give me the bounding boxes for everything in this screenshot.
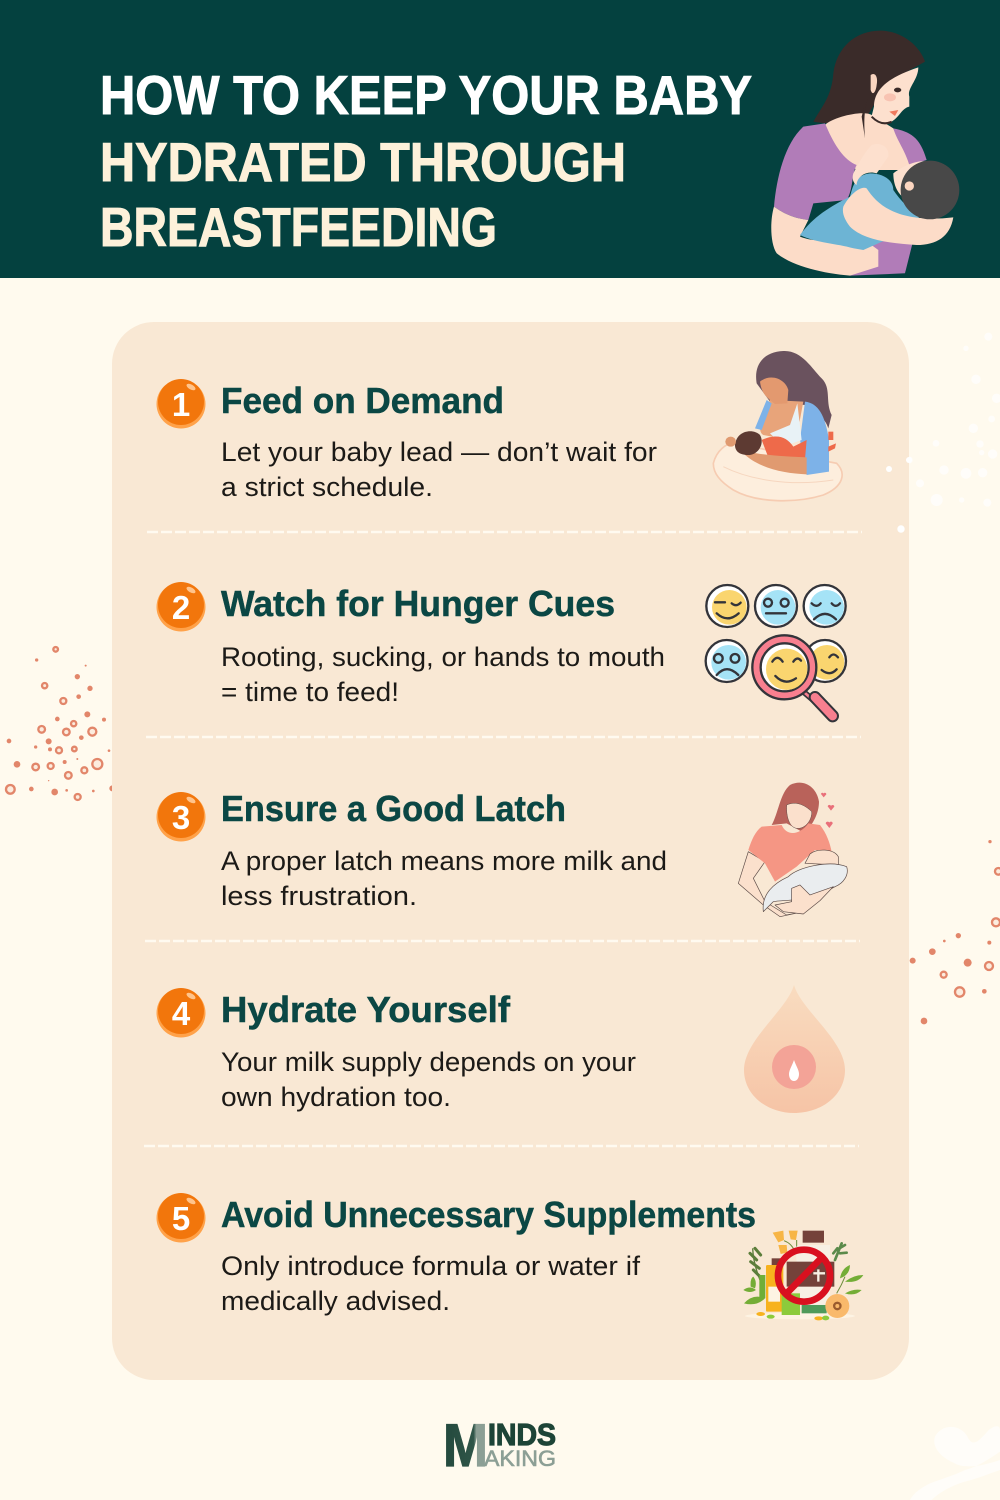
divider [147, 531, 862, 533]
body 2: = time to feed! [221, 677, 399, 707]
divider [145, 940, 860, 942]
body 5: Only introduce formula or water if [221, 1251, 641, 1281]
decoration: white flower bottom right [910, 1426, 1000, 1500]
divider [146, 736, 861, 738]
tip 5: avoid unnecessary supplements [156, 1193, 863, 1320]
tip 4: hydrate yourself [156, 985, 845, 1113]
number badge 5: 5 [172, 1200, 190, 1237]
number badge 3: 3 [172, 799, 190, 836]
body 3: less frustration. [221, 881, 417, 911]
body 2 [221, 642, 665, 707]
illustration: mother with nursing pillow [713, 351, 842, 501]
number badge 1 [156, 379, 206, 428]
body 3: A proper latch means more milk and [221, 846, 667, 876]
decoration: coral dots right [910, 840, 1000, 1024]
body 4: own hydration too. [221, 1082, 451, 1112]
illustration: mother holding wrapped baby [738, 783, 847, 917]
tip 1: feed on demand [156, 351, 842, 502]
icon: milk drop [744, 985, 845, 1113]
icon: emoji faces with magnifying glass [706, 585, 846, 716]
decoration: white dots top right [906, 333, 1000, 507]
heading 2: Watch for Hunger Cues [221, 583, 615, 624]
heading 1: Feed on Demand [221, 380, 504, 421]
heading 3: Ensure a Good Latch [221, 788, 566, 829]
body 1: a strict schedule. [221, 472, 433, 502]
decoration: coral dots left [6, 647, 120, 800]
white dots over panel [886, 457, 912, 533]
body 2: Rooting, sucking, or hands to mouth [221, 642, 665, 672]
number badge 1: 1 [172, 386, 190, 423]
body 4 [221, 1047, 636, 1112]
logo: Minds Making: M [443, 1412, 488, 1479]
body 4: Your milk supply depends on your [221, 1047, 636, 1077]
number badge 4 [156, 988, 206, 1038]
illustration: mother breastfeeding baby in header [771, 31, 959, 276]
number badge 4: 4 [172, 995, 191, 1032]
tip 2: watch for hunger cues [156, 582, 846, 716]
number badge 5 [156, 1193, 206, 1242]
body 3 [221, 846, 667, 911]
number badge 2 [156, 582, 206, 632]
tip 3: ensure a good latch [156, 783, 847, 917]
number badge 3 [156, 792, 206, 842]
icon: crossed-out supplements and herbs [743, 1231, 863, 1320]
logo: Minds Making [443, 1412, 556, 1479]
heading 5: Avoid Unnecessary Supplements [221, 1194, 756, 1235]
body 1: Let your baby lead — don’t wait for [221, 437, 657, 467]
panel: tips card [112, 322, 909, 1380]
title [100, 64, 752, 258]
logo: Minds Making: AKING [484, 1446, 556, 1471]
title: HYDRATED THROUGH [100, 131, 626, 193]
divider [144, 1145, 859, 1147]
body 5: medically advised. [221, 1286, 450, 1316]
logo: Minds Making: INDS [488, 1417, 556, 1452]
body 5 [221, 1251, 641, 1316]
title: HOW TO KEEP YOUR BABY [100, 64, 752, 126]
body 1 [221, 437, 657, 502]
heading 4: Hydrate Yourself [221, 989, 511, 1030]
number badge 2: 2 [172, 589, 190, 626]
title: BREASTFEEDING [100, 196, 497, 258]
header band [0, 0, 1000, 278]
